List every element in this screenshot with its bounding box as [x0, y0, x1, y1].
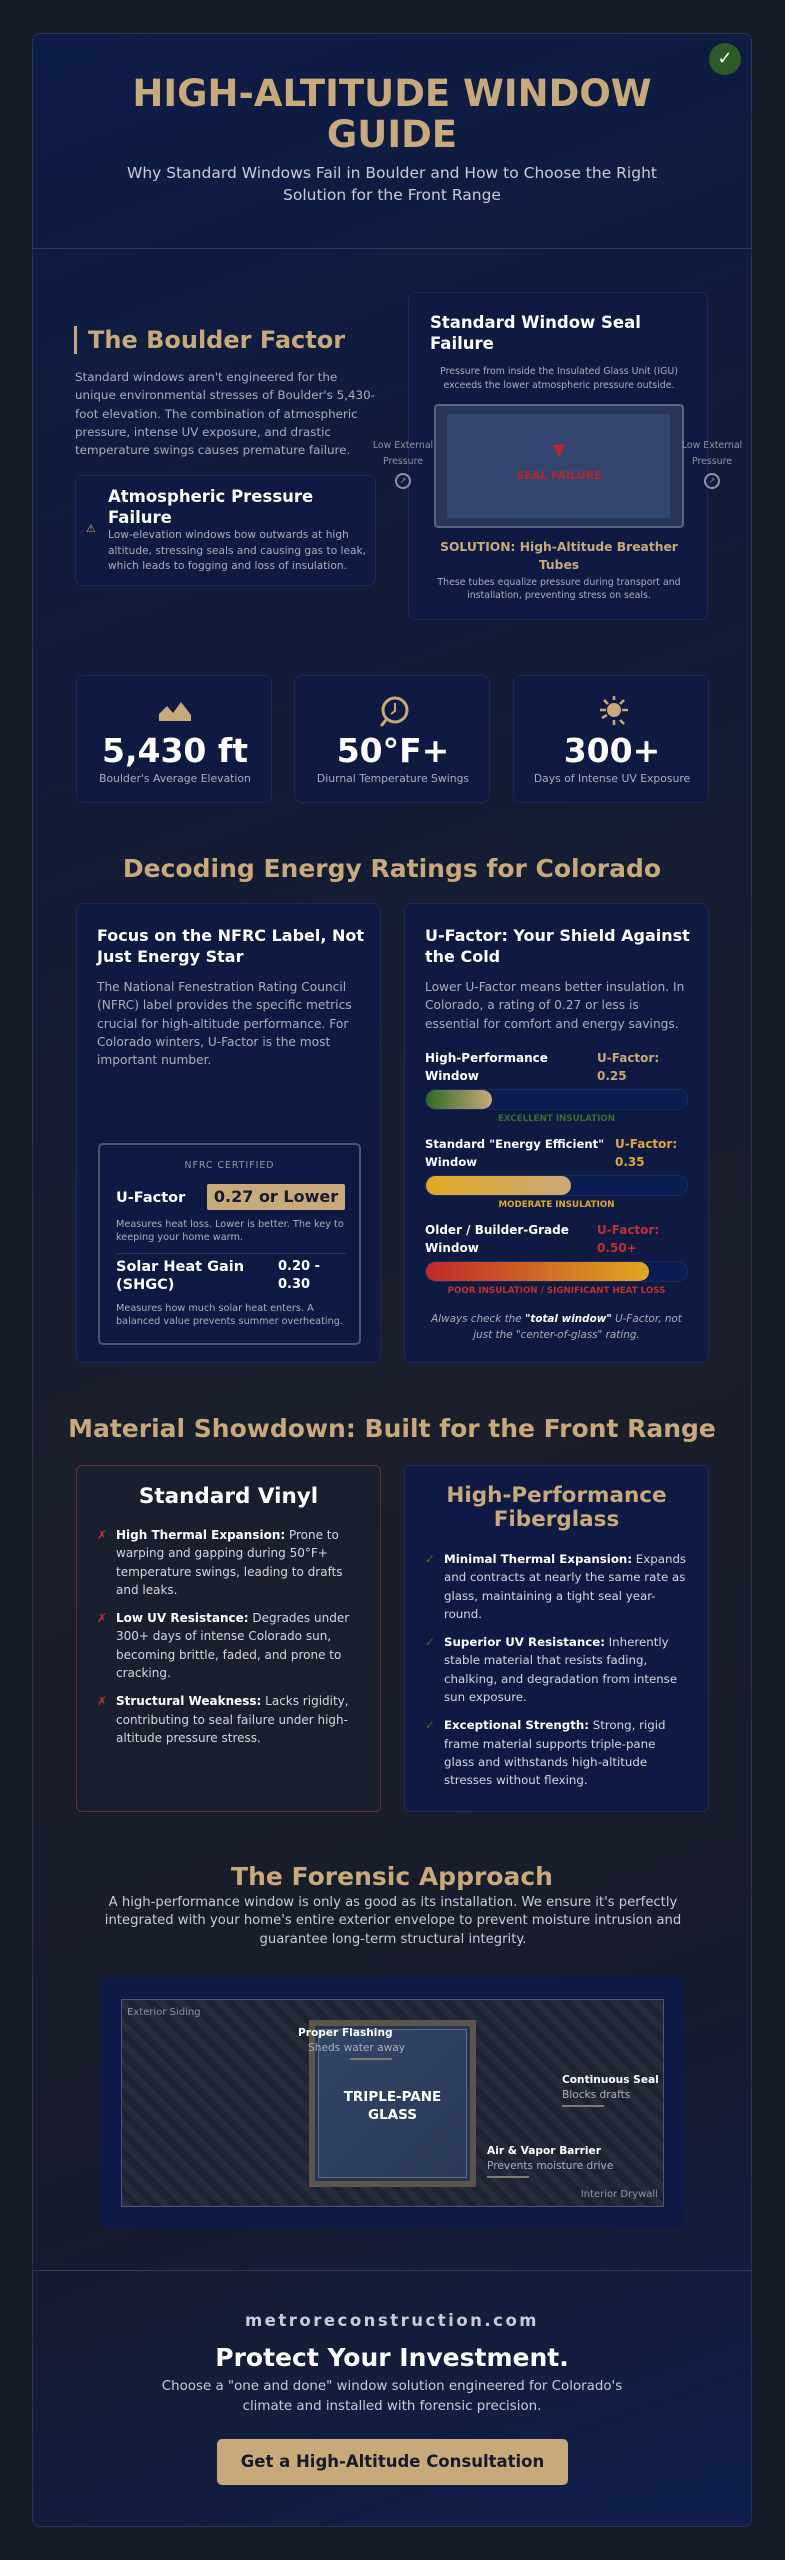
bar: older: Window	[425, 1241, 479, 1255]
heading: Focus on the NFRC Label, Not Just Energy Star	[97, 926, 364, 966]
stat: temperature: Diurnal Temperature Swings	[317, 772, 469, 785]
heading: Atmospheric Pressure Failure	[108, 487, 313, 527]
heading: Protect Your Investment.	[215, 2343, 569, 2372]
bar: high performance: U-Factor:	[597, 1051, 659, 1065]
panel: NFRC	[76, 903, 381, 1363]
bar: high performance: Window	[425, 1069, 479, 1083]
list: fiberglass pros: frame material supports triple-pane	[444, 1737, 655, 1751]
list: vinyl cons: Low UV Resistance: Degrades under 300+ days of intense Colorado sun, becoming brittle, faded, and prone to cracking.	[116, 1611, 349, 1680]
button: Get a High-Altitude Consultation	[241, 2452, 544, 2471]
solution: SOLUTION: High-Altitude Breather Tubes	[440, 540, 678, 572]
callout: seal	[562, 2074, 659, 2107]
heading: Failure	[430, 334, 494, 353]
subtitle: Why Standard Windows Fail in Boulder and How to Choose the Right Solution for the Front Range	[127, 164, 657, 204]
label: left pressure: ↗	[400, 476, 406, 485]
icon: check badge	[709, 43, 741, 75]
panel: vinyl	[76, 1465, 381, 1812]
heading	[430, 313, 641, 353]
stats row	[76, 675, 709, 803]
text: crucial for high-altitude performance. For	[97, 1017, 348, 1031]
label: right pressure: ↗	[709, 476, 715, 485]
title: GUIDE	[327, 113, 457, 156]
callout: barrier	[487, 2145, 613, 2178]
list: vinyl cons: Structural Weakness: Lacks rigidity, contributing to seal failure under high-altitude pressure stress.	[116, 1694, 349, 1745]
diagram: installation: Interior Drywall	[581, 2189, 658, 2200]
text: forensic: A high-performance window is only as good as its installation. We ensure it's perfectly integrated with your home's entire exterior envelope to prevent moisture intrusion and guarantee long-term structural integrity.	[105, 1895, 681, 1947]
panel: seal failure	[408, 292, 708, 620]
bar: standard: MODERATE INSULATION	[498, 1200, 614, 1210]
bar: older: POOR INSULATION / SIGNIFICANT HEAT LOSS	[448, 1286, 665, 1296]
text: The National Fenestration Rating Council	[97, 980, 346, 994]
note: Always check the "total window" U-Factor, not just the "center-of-glass" rating.	[431, 1313, 682, 1341]
heading: boulder factor: The Boulder Factor	[88, 326, 345, 354]
icon: sun	[600, 696, 628, 725]
U-Factor row: U-Factor	[116, 1190, 185, 1206]
bar: older: 0.50+	[597, 1241, 637, 1255]
list: fiberglass pros: ✓	[425, 1635, 435, 1649]
bar: high performance: 0.25	[597, 1069, 627, 1083]
text: Low-elevation windows bow outwards at high altitude, stressing seals and causing gas to leak, which leads to fogging and loss of insulation.	[108, 529, 366, 572]
list: fiberglass pros	[425, 1552, 686, 1787]
list: fiberglass pros: sun exposure.	[444, 1690, 527, 1704]
list: fiberglass pros: glass and withstands high-altitude	[444, 1755, 647, 1769]
list: fiberglass pros: round.	[444, 1607, 482, 1621]
panel: atmospheric pressure	[75, 475, 376, 586]
list: fiberglass pros: ✓	[425, 1718, 435, 1732]
panel: vinyl: Standard Vinyl	[139, 1484, 318, 1509]
icon: mountain	[159, 702, 191, 721]
heading: U-Factor: Your Shield Against the Cold	[425, 926, 690, 966]
bar: older: Older / Builder-Grade	[425, 1223, 569, 1237]
NFRC label box: 0.20 -	[278, 1259, 320, 1274]
list: vinyl cons: ✗	[97, 1694, 107, 1708]
bar: high performance: EXCELLENT INSULATION	[498, 1114, 615, 1124]
header	[32, 33, 752, 249]
stat: temperature: 50°F+	[337, 731, 449, 770]
button	[217, 2439, 568, 2485]
window frame	[309, 2020, 476, 2187]
label: left pressure: Low External Pressure	[373, 440, 433, 467]
list: fiberglass pros: Minimal Thermal Expansion: Expands	[444, 1552, 686, 1566]
label: right pressure	[682, 440, 742, 489]
bar: older: U-Factor:	[597, 1223, 659, 1237]
list: fiberglass pros: ✓	[425, 1552, 435, 1566]
icon: arrow: ▼	[553, 440, 565, 459]
diagram: installation: Exterior Siding	[127, 2007, 201, 2018]
icon: warning: ⚠	[86, 522, 96, 535]
list: fiberglass pros: Superior UV Resistance: Inherently	[444, 1635, 669, 1649]
list: fiberglass pros: and contracts at nearly the same rate as	[444, 1570, 685, 1584]
brand: metroreconstruction.com	[245, 2311, 539, 2330]
text: Lower U-Factor means better insulation. In Colorado, a rating of 0.27 or less is essential for comfort and energy savings.	[425, 980, 684, 1031]
text: important number.	[97, 1053, 211, 1067]
list: fiberglass pros: chalking, and degradation from intense	[444, 1672, 677, 1686]
SHGC row: Solar Heat Gain	[116, 1259, 244, 1275]
title	[132, 72, 652, 156]
text: Pressure from inside the Insulated Glass Unit (IGU) exceeds the lower atmospheric pressure outside.	[440, 366, 678, 390]
callout: flashing: Proper Flashing	[298, 2027, 393, 2039]
panel: fiberglass: High-Performance	[446, 1483, 667, 1508]
callout: flashing: Sheds water away	[308, 2042, 405, 2054]
stat: UV: Days of Intense UV Exposure	[534, 772, 690, 785]
callout: seal: Blocks drafts	[562, 2089, 630, 2101]
diagram: installation	[100, 1977, 685, 2228]
window diagram	[434, 404, 684, 528]
heading: material showdown: Material Showdown: Built for the Front Range	[68, 1414, 716, 1443]
list: fiberglass pros: stable material that resists fading,	[444, 1653, 647, 1667]
SHGC row: (SHGC)	[116, 1277, 174, 1293]
text: Colorado winters, U-Factor is the most	[97, 1035, 330, 1049]
badge: 0.27 or Lower	[214, 1187, 338, 1206]
label: seal failure: SEAL FAILURE	[516, 469, 602, 482]
NFRC label box: Measures how much solar heat enters. A balanced value prevents summer overheating.	[116, 1303, 343, 1327]
stat: UV: 300+	[564, 731, 660, 770]
NFRC label box: 0.30	[278, 1277, 310, 1292]
list: vinyl cons: ✗	[97, 1611, 107, 1625]
callout: flashing	[298, 2027, 405, 2060]
stat: elevation	[76, 675, 272, 803]
list: fiberglass pros: Exceptional Strength: Strong, rigid	[444, 1718, 666, 1732]
list: vinyl cons: High Thermal Expansion: Prone to warping and gapping during 50°F+ temperature swings, leading to drafts and leaks.	[116, 1528, 343, 1597]
text: Choose a "one and done" window solution engineered for Colorado's climate and installed with forensic precision.	[162, 2379, 622, 2414]
bar: high performance: High-Performance	[425, 1051, 548, 1065]
icon: check badge: ✓	[717, 48, 733, 69]
SHGC row	[116, 1259, 244, 1293]
stat: elevation: 5,430 ft	[102, 731, 248, 770]
callout: barrier: Air & Vapor Barrier	[487, 2145, 601, 2157]
icon: clock	[380, 696, 408, 727]
window frame: TRIPLE-PANE	[344, 2089, 441, 2105]
stat: UV	[513, 675, 709, 803]
footer CTA	[32, 2270, 752, 2527]
heading: energy ratings: Decoding Energy Ratings for Colorado	[123, 854, 661, 883]
bar: standard: Standard "Energy Efficient"	[425, 1137, 604, 1151]
section: boulder factor	[74, 292, 742, 620]
text: (NFRC) label provides the specific metrics	[97, 998, 352, 1012]
NFRC label box	[98, 1143, 361, 1345]
bar: high performance	[425, 1051, 688, 1124]
bar: standard: 0.35	[615, 1155, 645, 1169]
list: fiberglass pros: glass, maintaining a tight seal year-	[444, 1589, 656, 1603]
NFRC label box: NFRC CERTIFIED	[184, 1160, 275, 1171]
callout: seal: Continuous Seal	[562, 2074, 659, 2086]
panel: fiberglass	[404, 1465, 709, 1812]
label: left pressure	[373, 440, 433, 489]
callout: barrier: Prevents moisture drive	[487, 2160, 613, 2172]
list: fiberglass pros: stresses without flexing.	[444, 1773, 588, 1787]
bar: standard: U-Factor:	[615, 1137, 677, 1151]
badge	[207, 1184, 345, 1210]
bar: standard: Window	[425, 1155, 477, 1169]
stat: elevation: Boulder's Average Elevation	[99, 772, 251, 785]
window frame: GLASS	[368, 2107, 417, 2123]
text: These tubes equalize pressure during transport and installation, preventing stress on seals.	[437, 577, 681, 601]
panel: U-factor	[404, 903, 709, 1363]
title: HIGH-ALTITUDE WINDOW	[132, 72, 652, 115]
bar: standard	[425, 1137, 688, 1210]
text	[96, 980, 352, 1067]
bar: older	[425, 1223, 688, 1296]
panel: fiberglass: Fiberglass	[494, 1507, 619, 1532]
NFRC label box: Measures heat loss. Lower is better. The key to keeping your home warm.	[116, 1219, 344, 1243]
heading: forensic approach: The Forensic Approach	[231, 1862, 553, 1891]
list: vinyl cons: ✗	[97, 1528, 107, 1542]
label: right pressure: Low External Pressure	[682, 440, 742, 467]
stat: temperature	[294, 675, 490, 803]
heading: Standard Window Seal	[430, 313, 641, 332]
list: vinyl cons	[97, 1528, 350, 1745]
text: intro: Standard windows aren't engineered for the unique environmental stresses of Boulder's 5,430-foot elevation. The combination of atmospheric pressure, intense UV exposure, and drastic temperature swings causes premature failure.	[75, 370, 375, 457]
